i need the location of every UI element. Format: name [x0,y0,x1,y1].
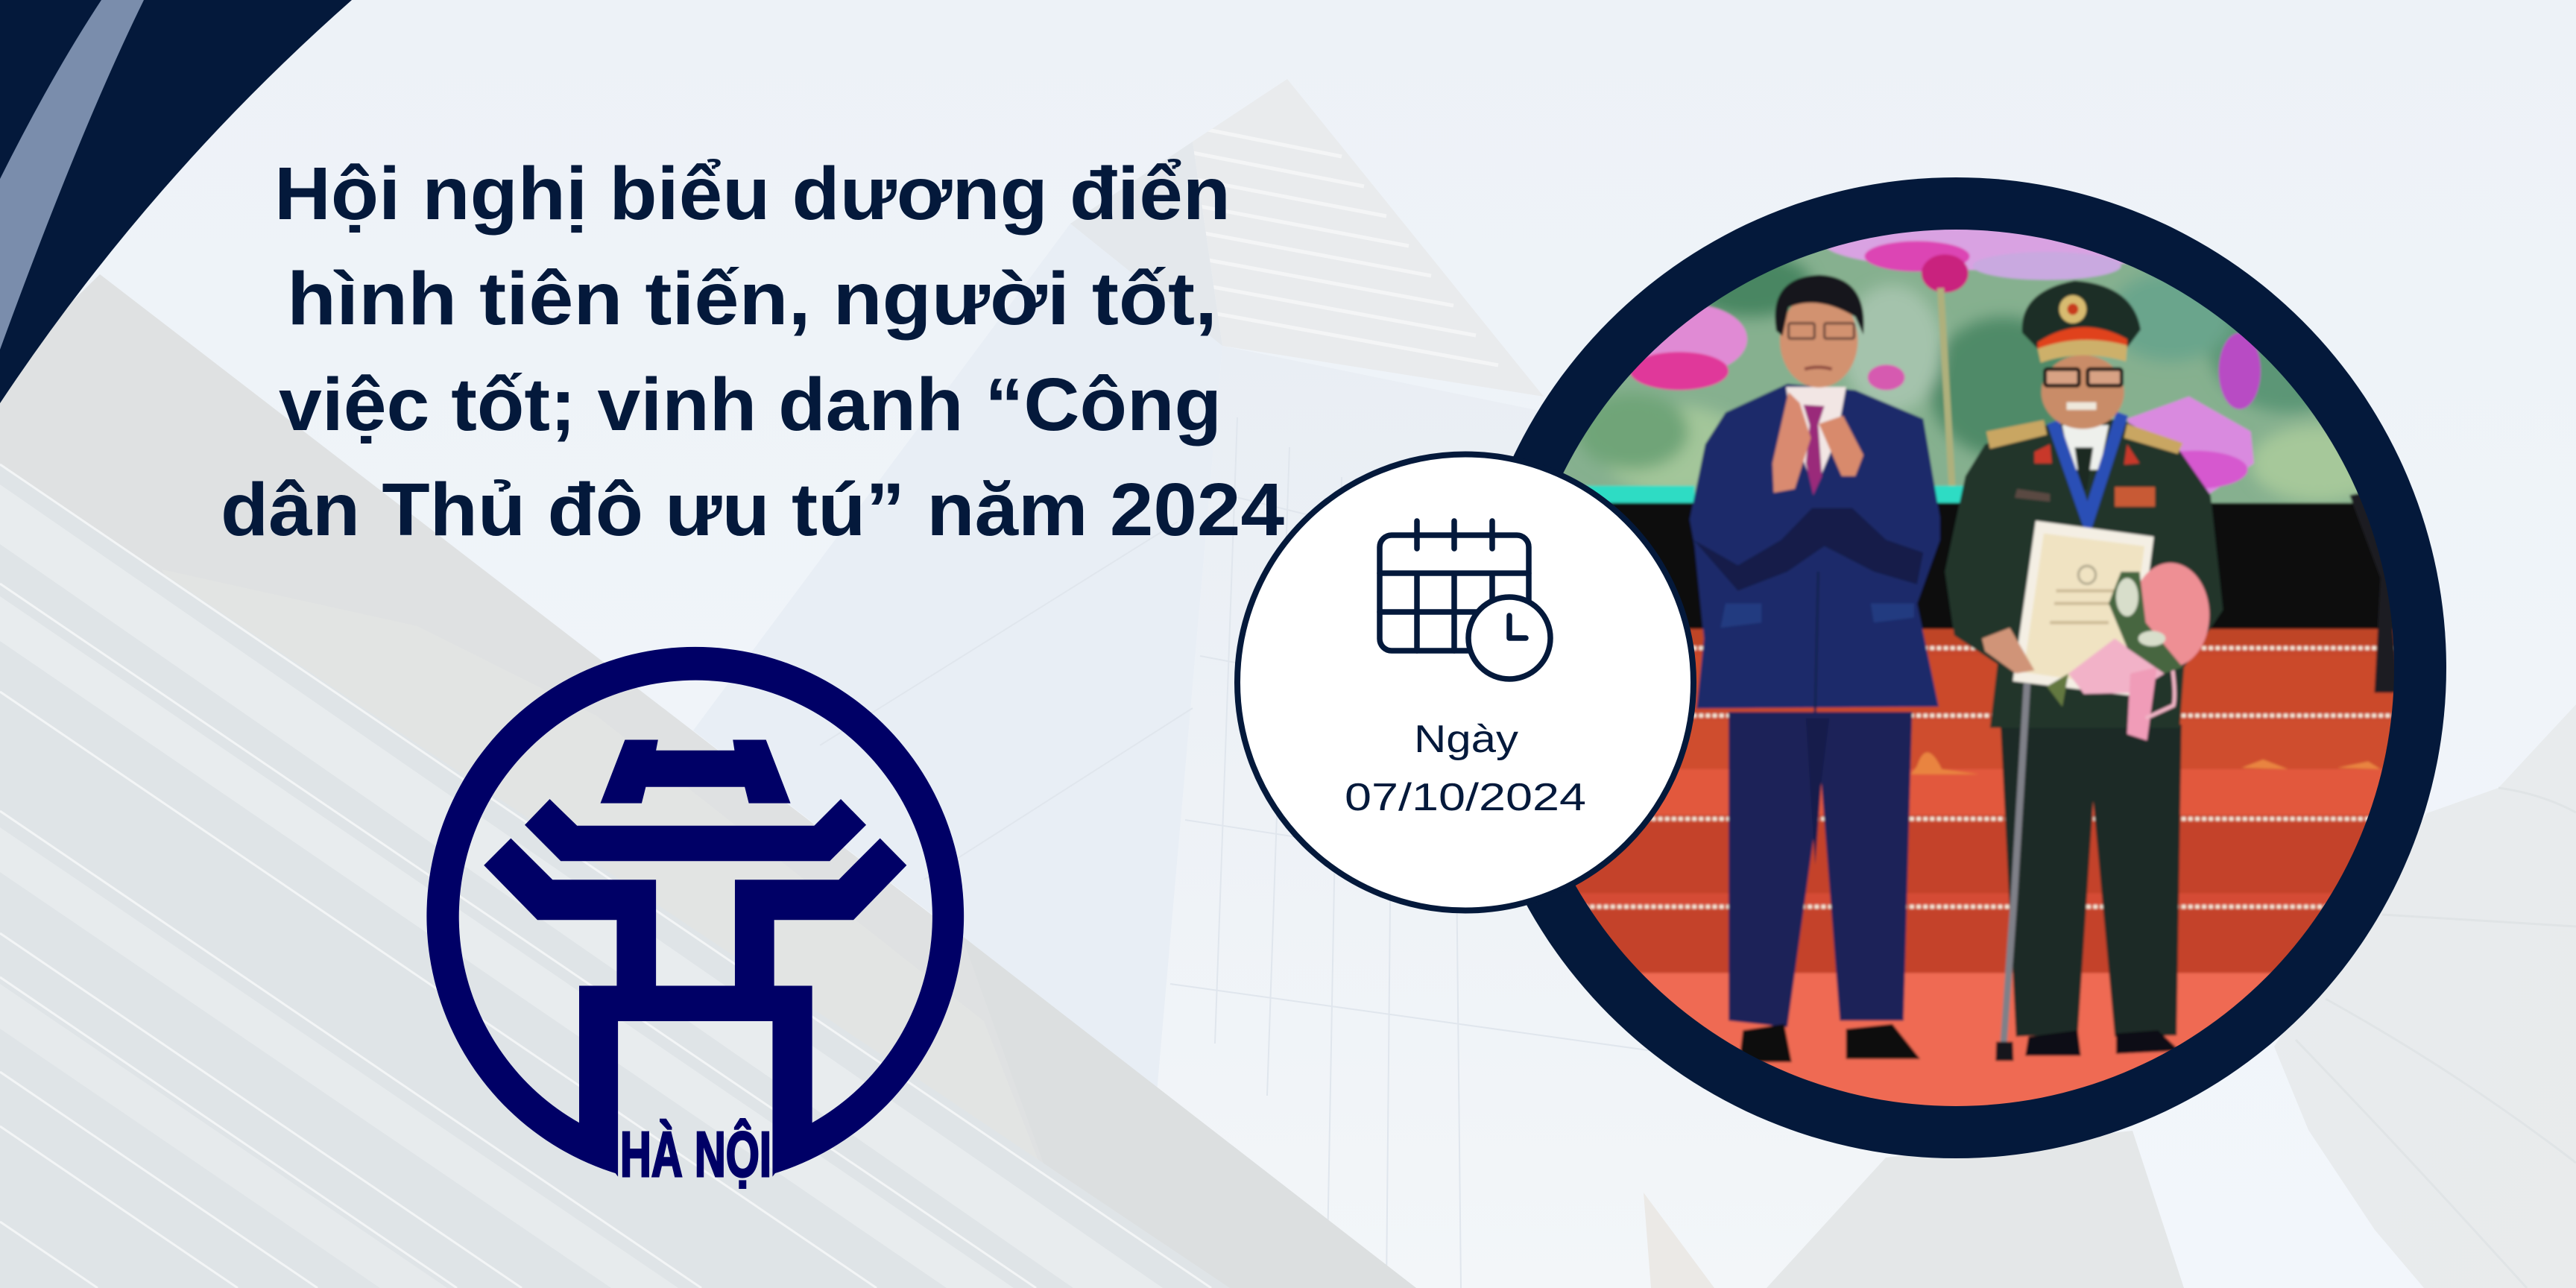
person: man in navy suit [1690,275,1940,1062]
gray diagonal band [0,274,1416,1288]
head [1780,293,1857,388]
icon: calendar with clock [1380,521,1550,679]
corner decoration: navy shape [0,0,352,403]
emblem gate [601,739,791,804]
date label: Ngày [1414,718,1518,761]
emblem ring [426,647,964,1174]
photo ring [1465,177,2446,1158]
hand on cane [1982,628,2035,674]
dark stage band [1609,501,2392,631]
flower bouquet [2047,674,2068,707]
title: dân Thủ đô ưu tú” năm 2024 [221,468,1284,552]
title: việc tốt; vinh danh “Công [279,363,1222,446]
tower stepped crown [1070,142,1222,346]
title: Hội nghị biểu dương điển [274,152,1231,236]
shirt and tie [1786,387,1846,489]
panel: date badge [1237,455,1693,911]
photo backdrop [1563,230,2358,505]
glass facade [0,464,1230,1288]
stage steps [1576,626,2394,1106]
lower glass of tower [1767,1131,2184,1288]
shoes [2025,1030,2179,1055]
medal ribbon [2053,414,2122,521]
epaulets [1986,420,2182,454]
date label [1345,718,1586,819]
head with cap [2042,355,2124,429]
date label: 07/10/2024 [1345,776,1586,819]
shirt and tie [2062,425,2109,470]
logo: Hanoi emblem [426,647,964,1190]
hands [1772,392,1811,493]
shoes [1739,1024,1920,1062]
certificate [2013,521,2154,696]
right dome [2274,704,2576,1288]
lotus flowers [1826,230,2127,271]
arm shadows [1693,508,1923,591]
person: veteran in green uniform [1945,280,2223,1061]
title: hình tiên tiến, người tốt, [287,257,1217,341]
tower window grid [820,417,1975,1288]
tower blue face [693,224,1222,1102]
title [221,152,1284,552]
tower facade [1156,346,2184,1288]
emblem label: HÀ NỘI [620,1119,771,1190]
lotus stem [1941,288,1953,502]
background figure [2349,489,2399,692]
cane [2004,683,2027,1043]
photo: award ceremony [1563,230,2394,1106]
